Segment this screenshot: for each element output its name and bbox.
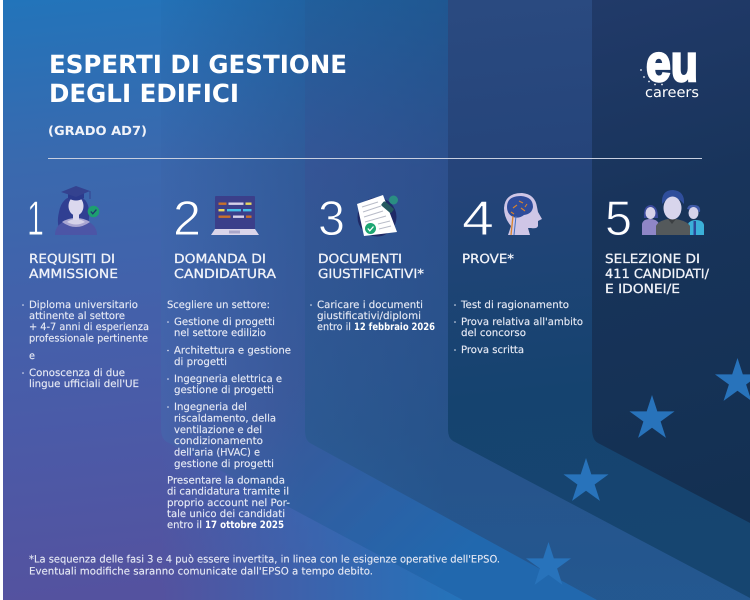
footnote: Eventuali modifiche saranno comunicate dall'EPSO a tempo debito. xyxy=(29,566,373,578)
documents text xyxy=(310,300,435,333)
field list: gestione di progetti xyxy=(174,385,274,396)
heading: DOMANDA DI xyxy=(174,251,266,266)
logo: EU careers: eu xyxy=(646,35,698,93)
step 1: requisiti di ammissione xyxy=(22,186,149,390)
icon: laptop xyxy=(211,196,259,235)
field list: di progetti xyxy=(174,357,227,368)
number 3: 3 xyxy=(318,192,345,246)
tests list xyxy=(454,300,583,356)
application instructions xyxy=(167,476,290,531)
requirements list: Diploma universitario xyxy=(29,300,138,311)
documents text: entro il xyxy=(317,322,351,333)
field list: Gestione di progetti xyxy=(174,317,275,328)
step 4: prove xyxy=(454,192,583,356)
subtitle: grade: (GRADO AD7) xyxy=(48,123,147,138)
panel: step 4 column xyxy=(448,0,750,598)
tests list: del concorso xyxy=(461,328,526,339)
field list: dell'aria (HVAC) e xyxy=(174,448,260,458)
requirements list: + 4-7 anni di esperienza xyxy=(29,322,149,333)
heading: 411 CANDIDATI/ xyxy=(605,266,710,281)
title xyxy=(49,50,347,108)
panel: step 2 column xyxy=(161,0,750,600)
footnote xyxy=(29,554,500,578)
tests list: Test di ragionamento xyxy=(460,300,569,311)
icon: group of people xyxy=(642,190,704,235)
requirements list: professionale pertinente xyxy=(29,334,148,344)
tests list: Prova scritta xyxy=(461,345,524,356)
number 4: 4 xyxy=(462,192,494,246)
requirements list: e xyxy=(29,351,35,362)
icon: head with brain xyxy=(504,193,542,235)
number 2: 2 xyxy=(173,192,201,246)
heading xyxy=(318,251,424,281)
heading: SELEZIONE DI xyxy=(605,251,700,266)
title: DEGLI EDIFICI xyxy=(49,79,239,108)
logo: EU careers: careers xyxy=(645,85,699,101)
field list: ventilazione e del xyxy=(174,425,262,436)
requirements list: Conoscenza di due xyxy=(29,368,125,379)
heading xyxy=(174,251,276,281)
documents text: Caricare i documenti xyxy=(317,300,423,311)
title: ESPERTI DI GESTIONE xyxy=(49,50,347,79)
application instructions: Presentare la domanda xyxy=(167,476,285,486)
documents text: 12 febbraio 2026 xyxy=(354,322,435,333)
heading: PROVE* xyxy=(462,251,514,266)
requirements list: lingue ufficiali dell'UE xyxy=(29,379,139,390)
field list: Ingegneria elettrica e xyxy=(174,374,282,385)
application instructions: 17 ottobre 2025 xyxy=(205,520,284,531)
step 2: domanda di candidatura xyxy=(167,192,291,531)
step 3: documenti giustificativi xyxy=(310,192,435,333)
panel: step 3 column xyxy=(305,0,750,600)
application instructions: entro il xyxy=(167,520,202,531)
icon: document xyxy=(357,195,398,236)
heading: E IDONEI/E xyxy=(605,281,680,296)
application instructions: proprio account nel Por- xyxy=(167,498,290,509)
requirements list: attinente al settore xyxy=(29,311,125,322)
heading: CANDIDATURA xyxy=(174,266,276,281)
field list: nel settore edilizio xyxy=(174,328,266,339)
field list xyxy=(167,300,291,470)
field list: riscaldamento, della xyxy=(174,414,276,424)
icon: star 3 xyxy=(526,542,571,585)
icon: star 1 xyxy=(629,395,675,438)
heading xyxy=(605,251,710,296)
heading xyxy=(29,251,118,281)
panel: step 5 column xyxy=(592,0,750,523)
heading: DOCUMENTI xyxy=(318,251,402,266)
tests list: Prova relativa all'ambito xyxy=(461,317,583,328)
icon: star 2 xyxy=(563,458,609,501)
field list: Scegliere un settore: xyxy=(167,300,270,311)
field list: Architettura e gestione xyxy=(174,346,291,356)
footnote: *La sequenza delle fasi 3 e 4 può essere invertita, in linea con le esigenze operative dell'EPSO. xyxy=(29,554,500,566)
heading: AMMISSIONE xyxy=(29,266,118,281)
field list: condizionamento xyxy=(174,436,263,447)
documents text: giustificativi/diplomi xyxy=(317,311,421,322)
application instructions: di candidatura tramite il xyxy=(167,486,289,498)
icon: graduate xyxy=(55,186,99,235)
icon: star 4 xyxy=(715,358,750,401)
field list: gestione di progetti xyxy=(174,459,274,470)
application instructions: tale unico dei candidati xyxy=(167,509,285,520)
heading: REQUISITI DI xyxy=(29,251,115,266)
number 5: 5 xyxy=(605,192,632,246)
step 5: selezione xyxy=(605,190,710,296)
field list: Ingegneria del xyxy=(174,402,247,413)
heading: GIUSTIFICATIVI* xyxy=(318,266,424,281)
number 1: 1 xyxy=(27,192,44,246)
requirements list xyxy=(22,300,149,390)
stars xyxy=(526,358,750,585)
